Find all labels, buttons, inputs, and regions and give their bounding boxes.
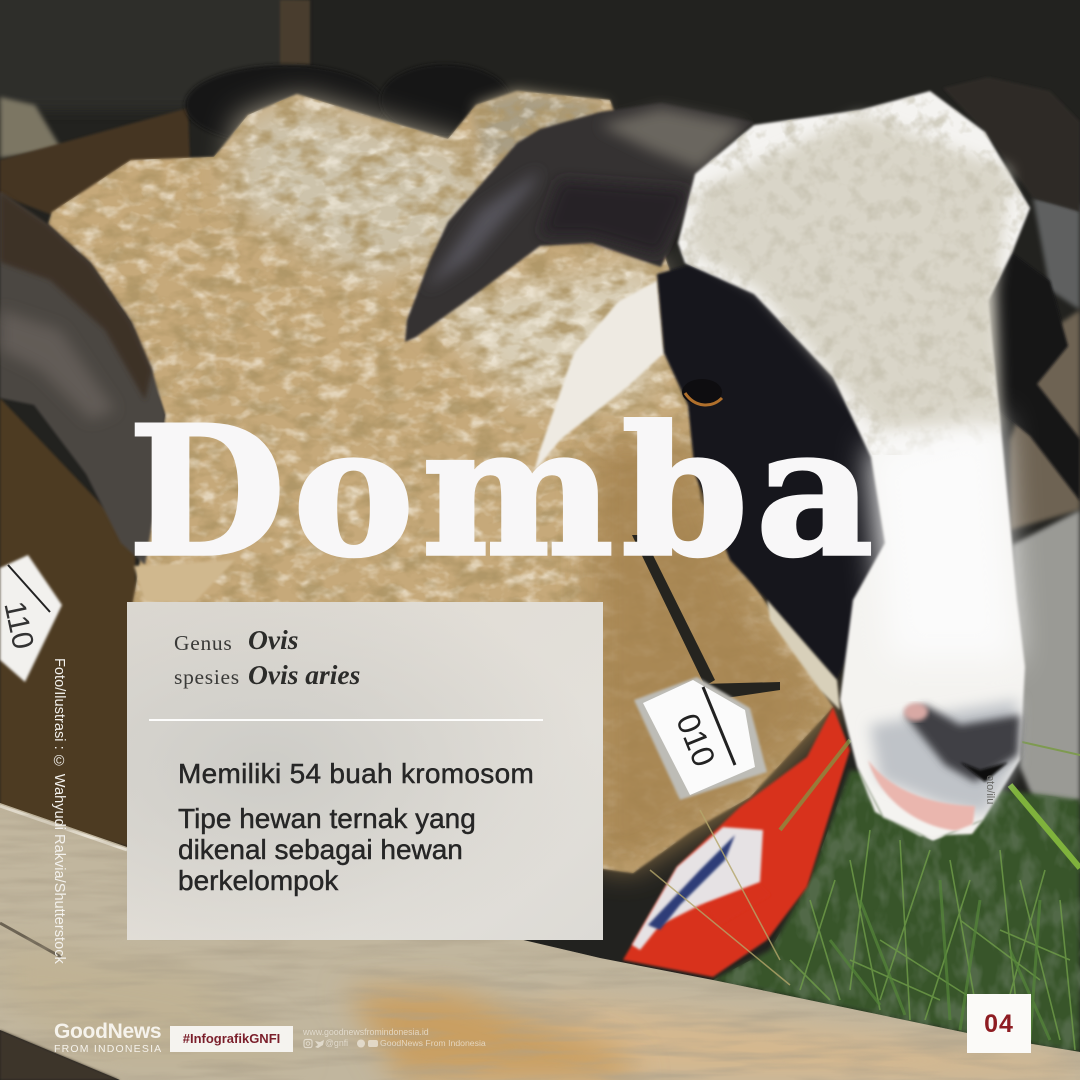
far horn xyxy=(943,77,1080,212)
hashtag badge xyxy=(170,1026,293,1052)
genus label: Genus xyxy=(174,631,232,655)
genus value: Ovis xyxy=(248,624,298,655)
species label: spesies xyxy=(174,665,240,689)
eye xyxy=(682,379,722,405)
logo: GoodNews From Indonesia: GoodNews xyxy=(54,1020,161,1043)
website and social handles: GoodNews From Indonesia xyxy=(380,1038,486,1048)
left horn xyxy=(0,192,235,602)
website and social handles: www.goodnewsfromindonesia.id xyxy=(303,1027,429,1037)
nose and mouth xyxy=(857,703,1020,840)
wooden pen plank xyxy=(0,800,1080,1080)
fact: herd animal: dikenal sebagai hewan xyxy=(178,834,463,865)
title: Domba xyxy=(128,387,881,596)
hashtag badge: #InfografikGNFI xyxy=(183,1031,280,1046)
right grey sheep xyxy=(1012,510,1080,815)
floppy white ear xyxy=(534,281,664,472)
logo: GoodNews From Indonesia xyxy=(54,1020,162,1055)
sheep black face xyxy=(657,262,885,680)
page number badge: 04 xyxy=(984,1010,1014,1038)
left ear tag xyxy=(0,555,62,682)
panel: facts card xyxy=(127,602,603,940)
fact: herd animal: berkelompok xyxy=(178,865,338,896)
fact: chromosomes: Memiliki 54 buah kromosom xyxy=(178,758,534,789)
logo: GoodNews From Indonesia: FROM INDONESIA xyxy=(54,1043,162,1055)
page number badge xyxy=(967,994,1031,1053)
far ear and black side of face xyxy=(988,253,1080,501)
divider xyxy=(149,719,543,721)
social icons xyxy=(303,1038,378,1048)
species value: Ovis aries xyxy=(248,659,360,690)
red feed sack xyxy=(623,707,850,985)
fact: herd animal: Tipe hewan ternak yang xyxy=(178,803,476,834)
neck tag with cord xyxy=(632,535,780,800)
white forehead and muzzle xyxy=(670,85,1040,840)
fact: herd animal xyxy=(178,803,476,896)
neck tag with cord: 010 xyxy=(669,709,723,771)
website and social handles xyxy=(303,1027,486,1048)
website and social handles: @gnfi xyxy=(325,1038,348,1048)
main horn xyxy=(405,103,754,342)
photo credit, vertical: Foto/Ilustrasi : © Wahyudi Rakvia/Shutterstock xyxy=(51,658,67,964)
sheep fleece xyxy=(0,90,860,890)
faint photo watermark: oto/ilu xyxy=(984,775,996,804)
fleece under the face xyxy=(767,600,840,710)
green grass xyxy=(710,742,1080,1060)
